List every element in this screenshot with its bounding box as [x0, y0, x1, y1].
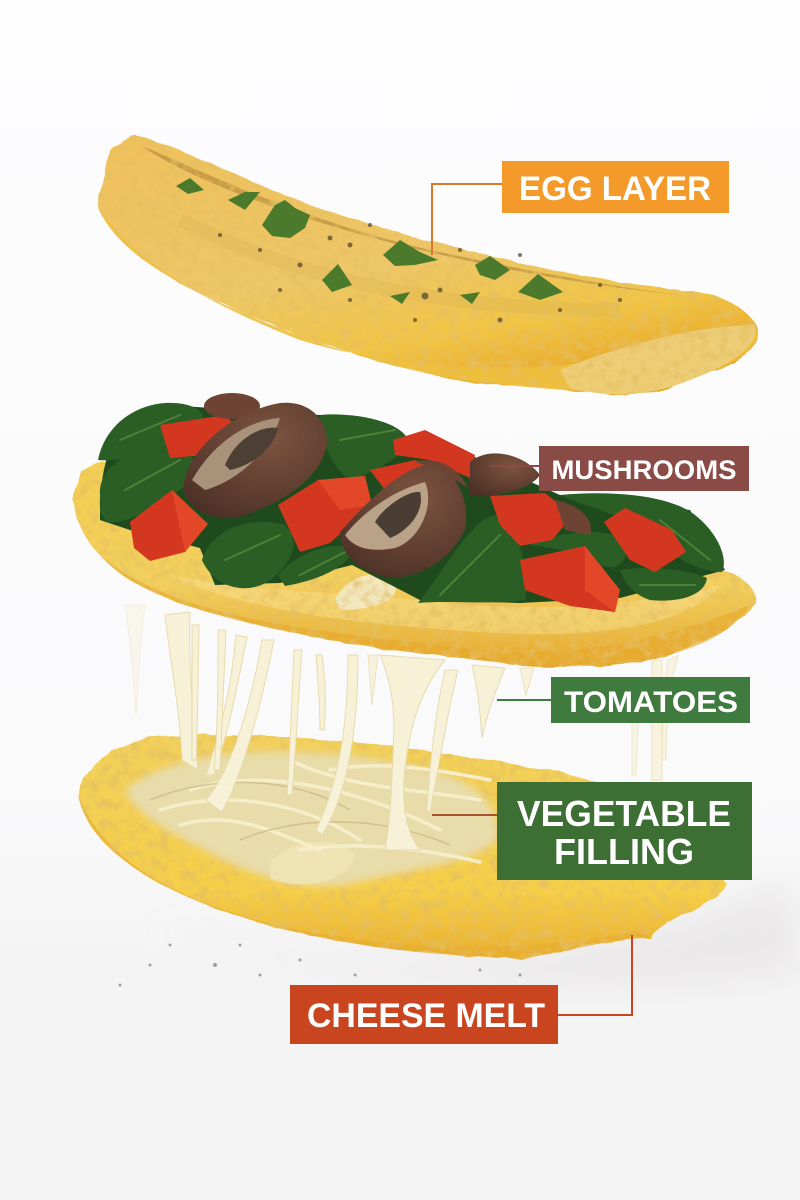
- top egg layer: [97, 136, 759, 394]
- spinach: [98, 403, 724, 603]
- label: vegetable filling: FILLING: [554, 831, 694, 872]
- vegetable filling: [98, 393, 725, 612]
- spinach highlights: [120, 415, 710, 595]
- filling base: [100, 405, 725, 603]
- middle egg layer: [73, 460, 755, 666]
- cheese pool: [125, 752, 498, 886]
- tomato shading: [172, 476, 620, 612]
- bottom egg layer: [78, 735, 727, 957]
- tomatoes: [130, 415, 686, 612]
- herbs and pepper on egg: [176, 178, 622, 322]
- label: cheese melt: CHEESE MELT: [307, 997, 545, 1035]
- label: tomatoes: TOMATOES: [564, 686, 738, 719]
- label: egg layer: [432, 161, 729, 255]
- label: vegetable filling: VEGETABLE: [517, 793, 731, 834]
- mushrooms: [184, 393, 591, 578]
- label: egg layer: EGG LAYER: [519, 170, 711, 208]
- label: mushrooms: MUSHROOMS: [552, 455, 736, 485]
- ground shadow: [150, 880, 800, 985]
- label: vegetable filling: [432, 782, 752, 880]
- label: cheese melt: [290, 935, 632, 1044]
- label: tomatoes: [497, 677, 750, 723]
- cheese strands: [125, 605, 678, 850]
- pepper specks on surface: [118, 944, 522, 986]
- label: mushrooms: [490, 446, 749, 491]
